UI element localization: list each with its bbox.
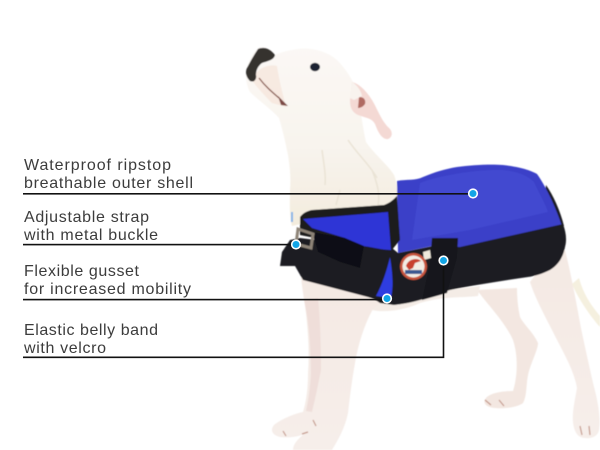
callout text xyxy=(23,209,158,244)
coat black back edge xyxy=(545,185,564,228)
front legs xyxy=(272,270,385,450)
callout text: Adjustable strap xyxy=(24,209,149,226)
logo patch xyxy=(400,253,427,280)
white tag xyxy=(423,250,431,260)
callout text xyxy=(24,263,191,298)
callout: waterproof shell xyxy=(23,157,477,198)
blue trim at chest xyxy=(291,212,293,222)
callout text: Waterproof ripstop xyxy=(24,157,171,174)
far hind leg xyxy=(477,288,538,408)
near hind leg xyxy=(530,250,600,438)
marker dot xyxy=(383,294,391,303)
belly band xyxy=(422,238,458,300)
mouth xyxy=(259,78,279,98)
front panel blue xyxy=(303,212,391,250)
gusset xyxy=(376,257,393,298)
marker dot xyxy=(292,240,300,249)
leader line xyxy=(23,299,387,300)
dog photo illustration xyxy=(246,47,600,450)
coat black skirt xyxy=(280,224,566,305)
paw toe marks xyxy=(283,400,590,436)
callout text: with metal buckle xyxy=(23,227,158,244)
leader line xyxy=(23,261,444,357)
callout text: Flexible gusset xyxy=(24,263,140,280)
chest strap webbing xyxy=(312,232,364,268)
nose xyxy=(246,48,275,82)
leader line xyxy=(23,193,473,195)
callout text xyxy=(24,157,193,192)
neck fold shading xyxy=(322,140,379,205)
marker dot xyxy=(439,256,448,265)
tail xyxy=(572,278,600,327)
leader line xyxy=(23,244,296,245)
coat shell highlight xyxy=(412,170,548,240)
front panel border xyxy=(300,196,400,251)
marker dot xyxy=(469,189,477,198)
ear xyxy=(350,82,392,139)
front leg shadow xyxy=(304,298,321,412)
ear flap white xyxy=(350,82,362,100)
muzzle blush xyxy=(252,65,286,107)
belly xyxy=(372,286,480,311)
callout text: for increased mobility xyxy=(24,281,191,298)
callout text: breathable outer shell xyxy=(24,175,193,192)
callout text: with velcro xyxy=(23,340,106,357)
callout: adjustable strap xyxy=(23,209,300,249)
head and neck xyxy=(246,47,398,226)
coat xyxy=(280,165,566,305)
inner ear xyxy=(358,97,365,108)
metal buckle xyxy=(296,229,313,248)
callout text xyxy=(23,322,158,357)
callout text: Elastic belly band xyxy=(24,322,158,339)
callout: flexible gusset xyxy=(23,263,391,303)
callout: elastic belly band xyxy=(23,256,448,357)
eye xyxy=(310,63,320,71)
coat blue shell xyxy=(397,165,562,253)
